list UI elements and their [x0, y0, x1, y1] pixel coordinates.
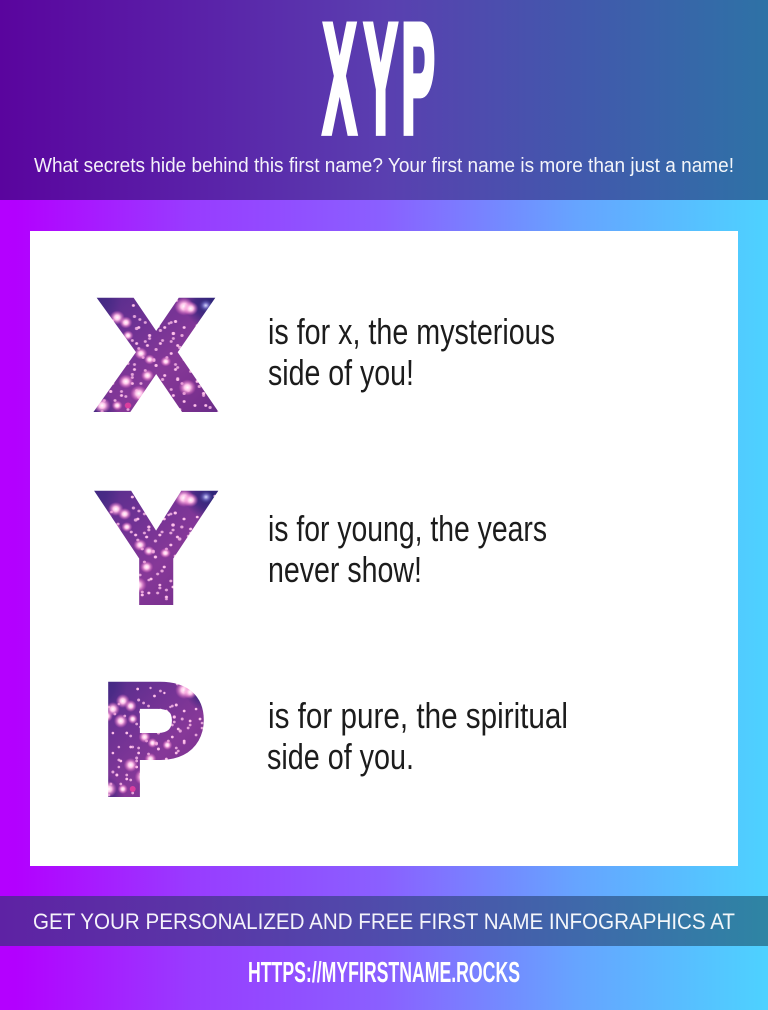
text: X meaning: is for x, the mysterious: [268, 311, 555, 352]
text: Y meaning: is for young, the years: [268, 508, 547, 549]
call-to-action text: GET YOUR PERSONALIZED AND FREE FIRST NAME INFOGRAPHICS AT: [33, 909, 735, 934]
text: P meaning: is for pure, the spiritual: [268, 695, 568, 736]
footer call-to-action strip: [0, 896, 768, 946]
icon: galaxy letter P: P: [103, 654, 204, 825]
footer URL: HTTPS://MYFIRSTNAME.ROCKS: [248, 957, 520, 989]
text: X meaning: side of you!: [268, 352, 414, 393]
white content panel: [30, 231, 738, 866]
icon: galaxy letter X: X: [101, 269, 211, 440]
row: letter Y: [100, 463, 547, 634]
header band: [0, 0, 768, 200]
text: P meaning: side of you.: [267, 736, 414, 777]
row: letter X: [101, 269, 555, 440]
row: letter P: [103, 654, 568, 825]
subtitle: What secrets hide behind this first name? Your first name is more than just a name!: [34, 155, 734, 177]
text: Y meaning: never show!: [268, 549, 422, 590]
icon: galaxy letter Y: Y: [100, 463, 212, 634]
